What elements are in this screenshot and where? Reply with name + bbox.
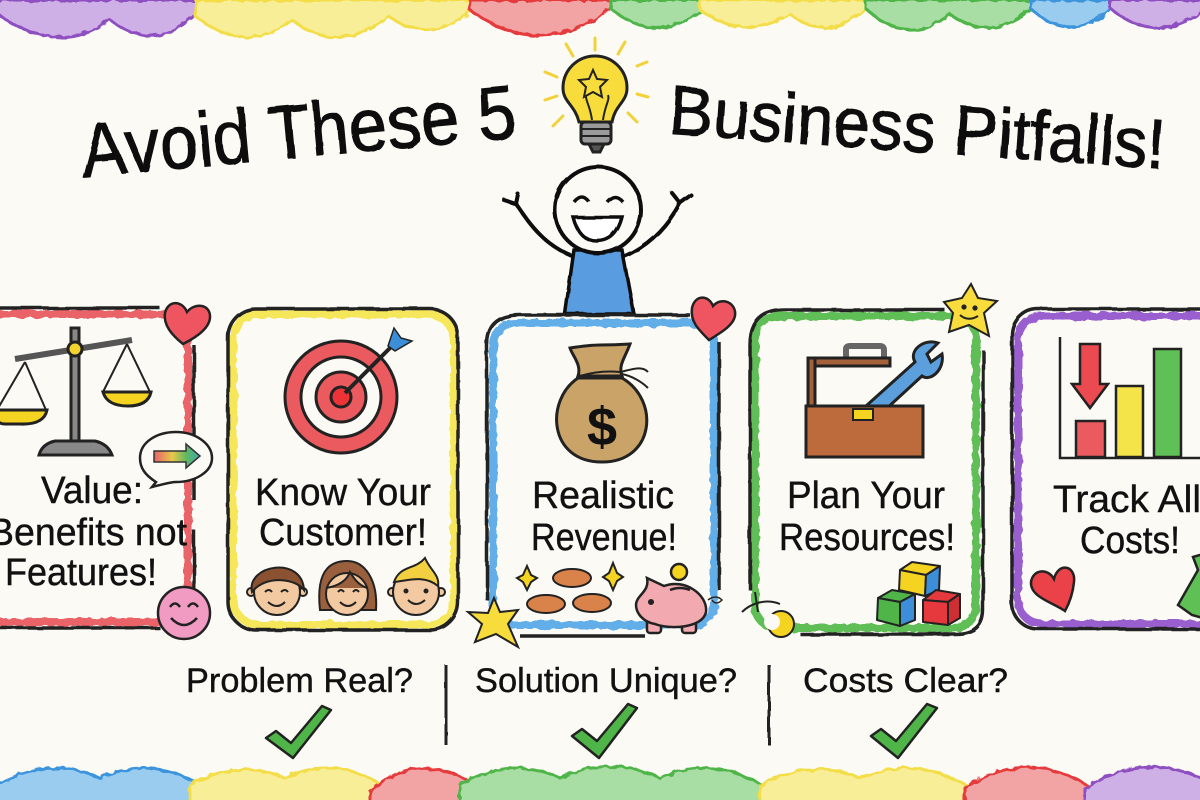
check marks — [266, 704, 937, 758]
icon: heart — [1031, 568, 1074, 611]
icon: coins and sparkles — [517, 563, 623, 613]
card frame — [493, 323, 714, 625]
icon: light bulb — [545, 38, 648, 152]
card heading: Know Your — [255, 472, 431, 514]
card frame — [233, 314, 454, 625]
card heading — [0, 470, 187, 594]
panel: realistic revenue — [468, 298, 735, 647]
icon: toolbox with wrench — [806, 342, 942, 457]
check labels: Solution Unique? — [475, 662, 737, 700]
figure head — [555, 167, 641, 253]
card frame — [1018, 316, 1200, 624]
card heading: Value: — [41, 470, 143, 512]
icon: smiling star — [944, 284, 997, 336]
icon: moon doodle — [742, 592, 794, 637]
card heading: Costs! — [1080, 520, 1180, 562]
card heading: Plan Your — [787, 475, 945, 517]
card heading — [1053, 479, 1200, 562]
card heading: Features! — [5, 552, 157, 594]
icon: piggy bank — [636, 564, 722, 633]
title: Business Pitfalls! — [667, 71, 1168, 184]
panel: know your customer — [228, 309, 458, 630]
card heading — [255, 472, 431, 554]
check labels: Costs Clear? — [803, 662, 1008, 700]
card heading: Track All — [1053, 479, 1200, 521]
card frame — [755, 316, 976, 628]
card heading: Customer! — [259, 512, 427, 554]
icon: scales — [0, 328, 151, 455]
dividers — [446, 665, 769, 745]
icon: green up arrow — [1178, 552, 1200, 620]
stick figure — [504, 167, 691, 314]
figure arms — [504, 193, 691, 256]
icon: money bag: $ — [587, 397, 617, 457]
icon: toy blocks — [877, 562, 960, 626]
bottom crayon border — [0, 766, 1200, 800]
icon: heart — [692, 298, 735, 340]
figure body — [565, 250, 634, 314]
icon: speech bubble arrow — [140, 432, 212, 487]
card heading: Realistic — [532, 475, 674, 517]
check labels: Problem Real? — [186, 662, 413, 700]
panel: plan your resources — [742, 284, 997, 637]
top crayon border — [0, 0, 1200, 37]
title — [77, 70, 1168, 194]
icon: three faces — [247, 558, 445, 615]
icon: target — [285, 328, 412, 453]
checklist — [186, 662, 1008, 758]
panel: value — [0, 303, 212, 639]
icon: heart — [165, 303, 210, 344]
card heading: Resources! — [779, 517, 955, 559]
figure face — [574, 197, 623, 202]
icon: star — [468, 598, 518, 647]
card frame — [0, 314, 188, 622]
card heading — [779, 475, 955, 559]
check labels — [186, 662, 1008, 700]
title: Avoid These 5 — [77, 70, 520, 194]
card heading: Revenue! — [531, 517, 677, 559]
icon: smiley — [158, 587, 210, 639]
icon: money bag — [557, 344, 648, 462]
card heading — [531, 475, 677, 559]
bar chart — [1060, 337, 1200, 458]
panel: track all costs — [1012, 309, 1200, 629]
